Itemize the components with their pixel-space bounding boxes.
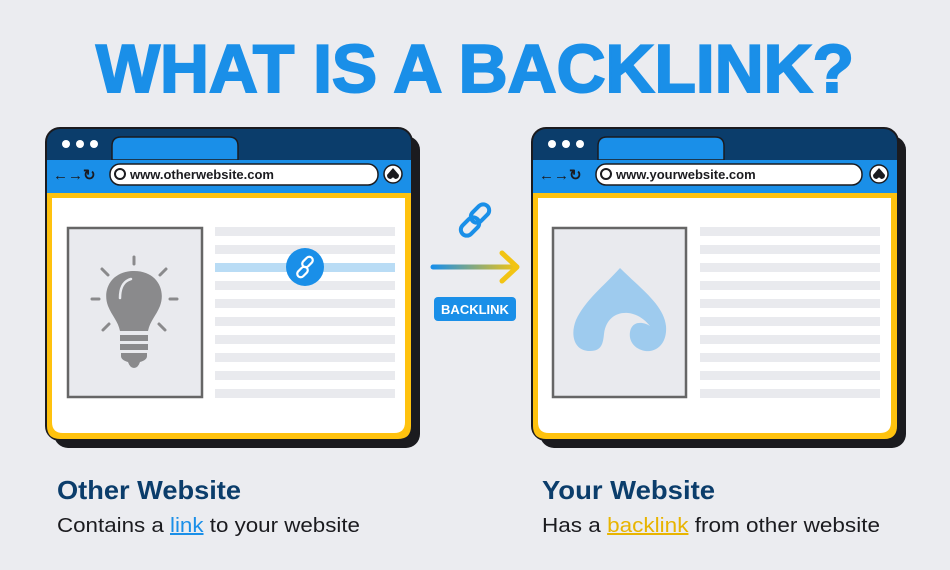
image: logo (553, 228, 686, 397)
panel: your website browser (532, 128, 906, 448)
arrow (433, 253, 517, 281)
text lines (215, 227, 395, 398)
badge: backlink (434, 297, 516, 321)
address bar: www.otherwebsite.com (129, 167, 274, 182)
title: WHAT IS A BACKLINK? (96, 31, 854, 107)
nav arrows: ←→↻ (539, 167, 582, 184)
icon: link circle (286, 248, 324, 286)
address bar (596, 164, 862, 185)
panel: other website browser (46, 128, 420, 448)
address bar: www.yourwebsite.com (615, 167, 756, 182)
text: other website caption: Contains a link to your website (57, 515, 360, 537)
icon: home (870, 165, 888, 183)
heading: your website: Your Website (542, 475, 715, 505)
heading: other website: Other Website (57, 475, 241, 505)
text: your website caption: Has a backlink from other website (542, 515, 880, 537)
nav arrows: ←→↻ (53, 167, 96, 184)
icon: home (384, 165, 402, 183)
address bar (110, 164, 378, 185)
icon: chain (458, 202, 492, 238)
badge: backlink: BACKLINK (441, 302, 510, 317)
image: lightbulb (68, 228, 202, 397)
text lines (700, 227, 880, 398)
